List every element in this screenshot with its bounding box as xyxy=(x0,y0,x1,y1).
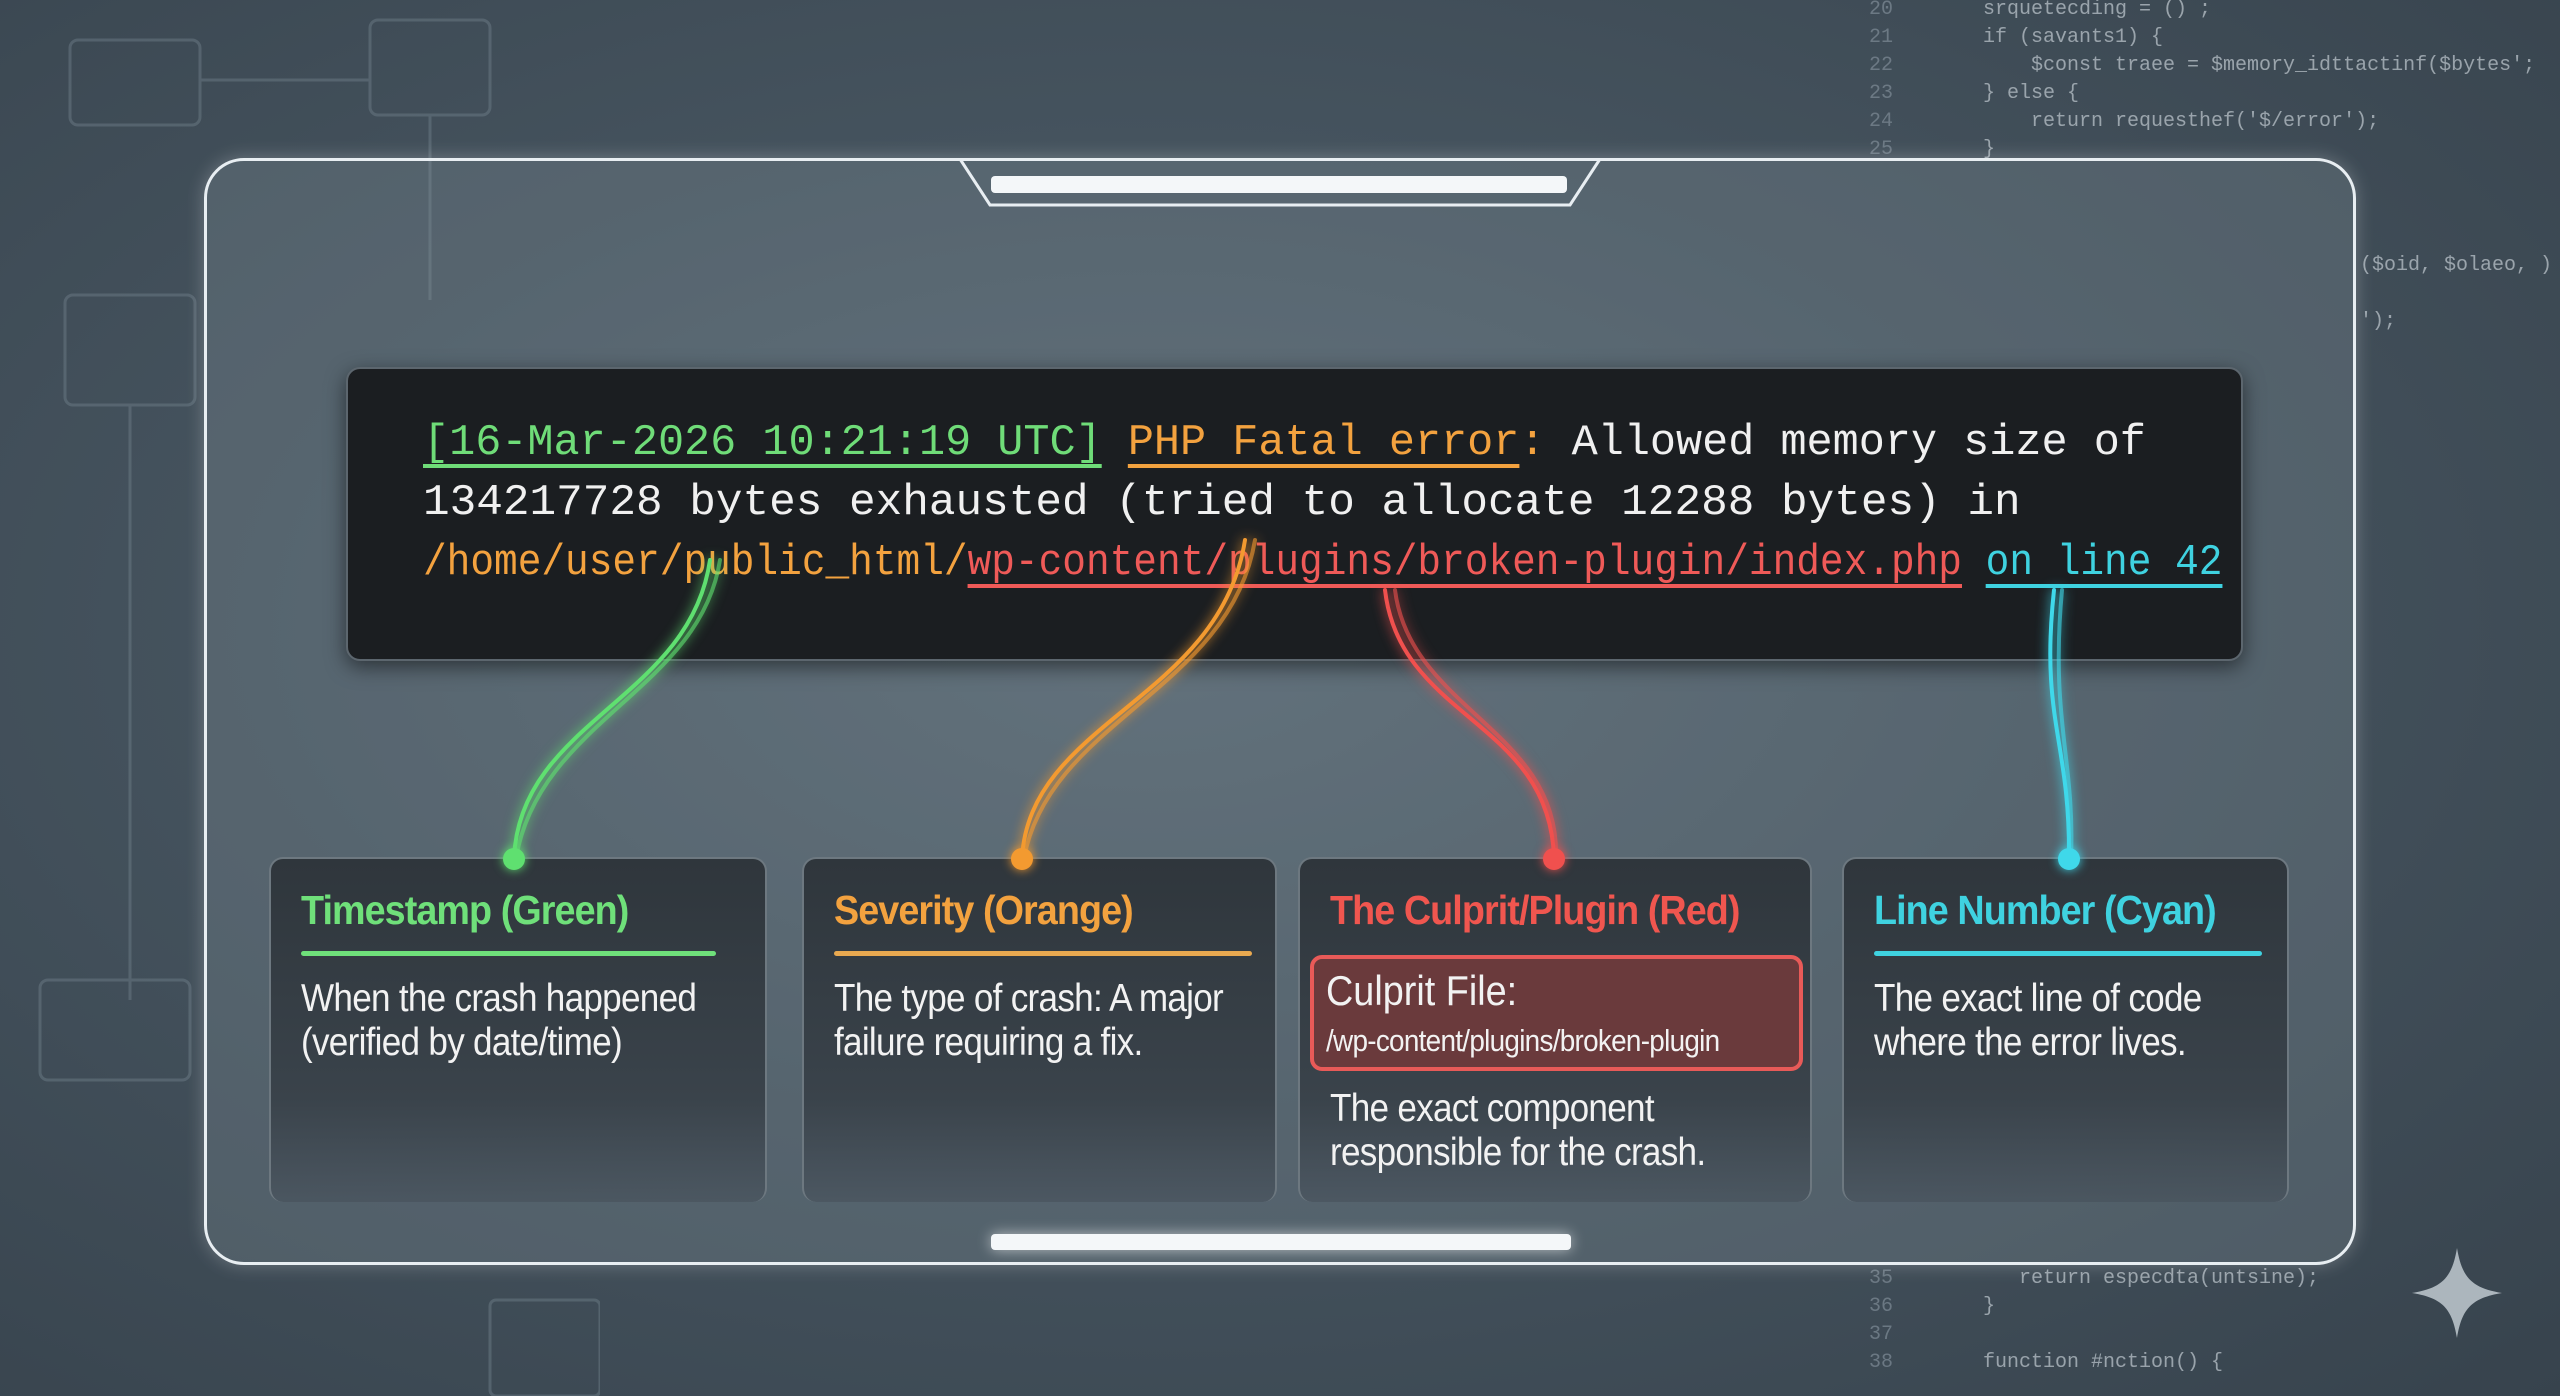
card: severity: The type of crash: A major xyxy=(834,977,1223,1020)
background code: right: 25 xyxy=(1869,138,1893,161)
background code: lower right: 36 xyxy=(1869,1295,1893,1318)
card: culprit xyxy=(1298,857,1812,1202)
connector dots xyxy=(503,848,525,870)
background code: right: 23 xyxy=(1869,82,1893,105)
background code: lower right: 35 xyxy=(1869,1267,1893,1290)
card: culprit: The exact component xyxy=(1330,1087,1654,1130)
background code: lower right: 37 xyxy=(1869,1323,1893,1346)
card: timestamp xyxy=(269,857,767,1202)
background code: right: 24 xyxy=(1869,110,1893,133)
main frame xyxy=(204,158,2356,1265)
culprit file box: Culprit File: xyxy=(1326,967,1517,1014)
card: severity xyxy=(802,857,1277,1202)
culprit file box: /wp-content/plugins/broken-plugin xyxy=(1326,1023,1719,1058)
background code fragments: ($oid, $olaeo, ) '); xyxy=(2360,254,2552,333)
background code: lower right: return especdta(untsine); } function #nction() { xyxy=(1983,1267,2319,1374)
icon: sparkle star xyxy=(2412,1248,2502,1338)
card: timestamp: Timestamp (Green) xyxy=(301,887,628,933)
card: timestamp: When the crash happened xyxy=(301,977,696,1020)
background code: right: 22 xyxy=(1869,54,1893,77)
card: severity: failure requiring a fix. xyxy=(834,1021,1143,1064)
card: culprit: The Culprit/Plugin (Red) xyxy=(1330,887,1740,933)
top notch and bar xyxy=(960,161,1600,206)
card: line number xyxy=(1842,857,2289,1202)
culprit file box xyxy=(1310,955,1803,1071)
background code: right: 21 xyxy=(1869,26,1893,49)
card: culprit: responsible for the crash. xyxy=(1330,1131,1705,1174)
background diagram boxes xyxy=(38,18,600,1396)
background code: lower right: 38 xyxy=(1869,1351,1893,1374)
terminal log: /home/user/public_html/wp-content/plugins/broken-plugin/index.php on line 42 xyxy=(423,539,2222,588)
card: line number: The exact line of code xyxy=(1874,977,2202,1020)
card: timestamp: (verified by date/time) xyxy=(301,1021,622,1064)
card: line number: where the error lives. xyxy=(1874,1021,2186,1064)
bottom bar xyxy=(991,1234,1571,1250)
background code: right: srquetecding = () ; if (savants1) { $const traee = $memory_idttactinf($bytes'; } else { return requesthef('$/error'); } xyxy=(1983,0,2535,161)
terminal log: 134217728 bytes exhausted (tried to allocate 12288 bytes) in xyxy=(423,479,2021,528)
card: severity: Severity (Orange) xyxy=(834,887,1133,933)
card: line number: Line Number (Cyan) xyxy=(1874,887,2216,933)
terminal log: [16-Mar-2026 10:21:19 UTC] PHP Fatal error: Allowed memory size of xyxy=(423,419,2146,468)
terminal log xyxy=(346,367,2243,661)
